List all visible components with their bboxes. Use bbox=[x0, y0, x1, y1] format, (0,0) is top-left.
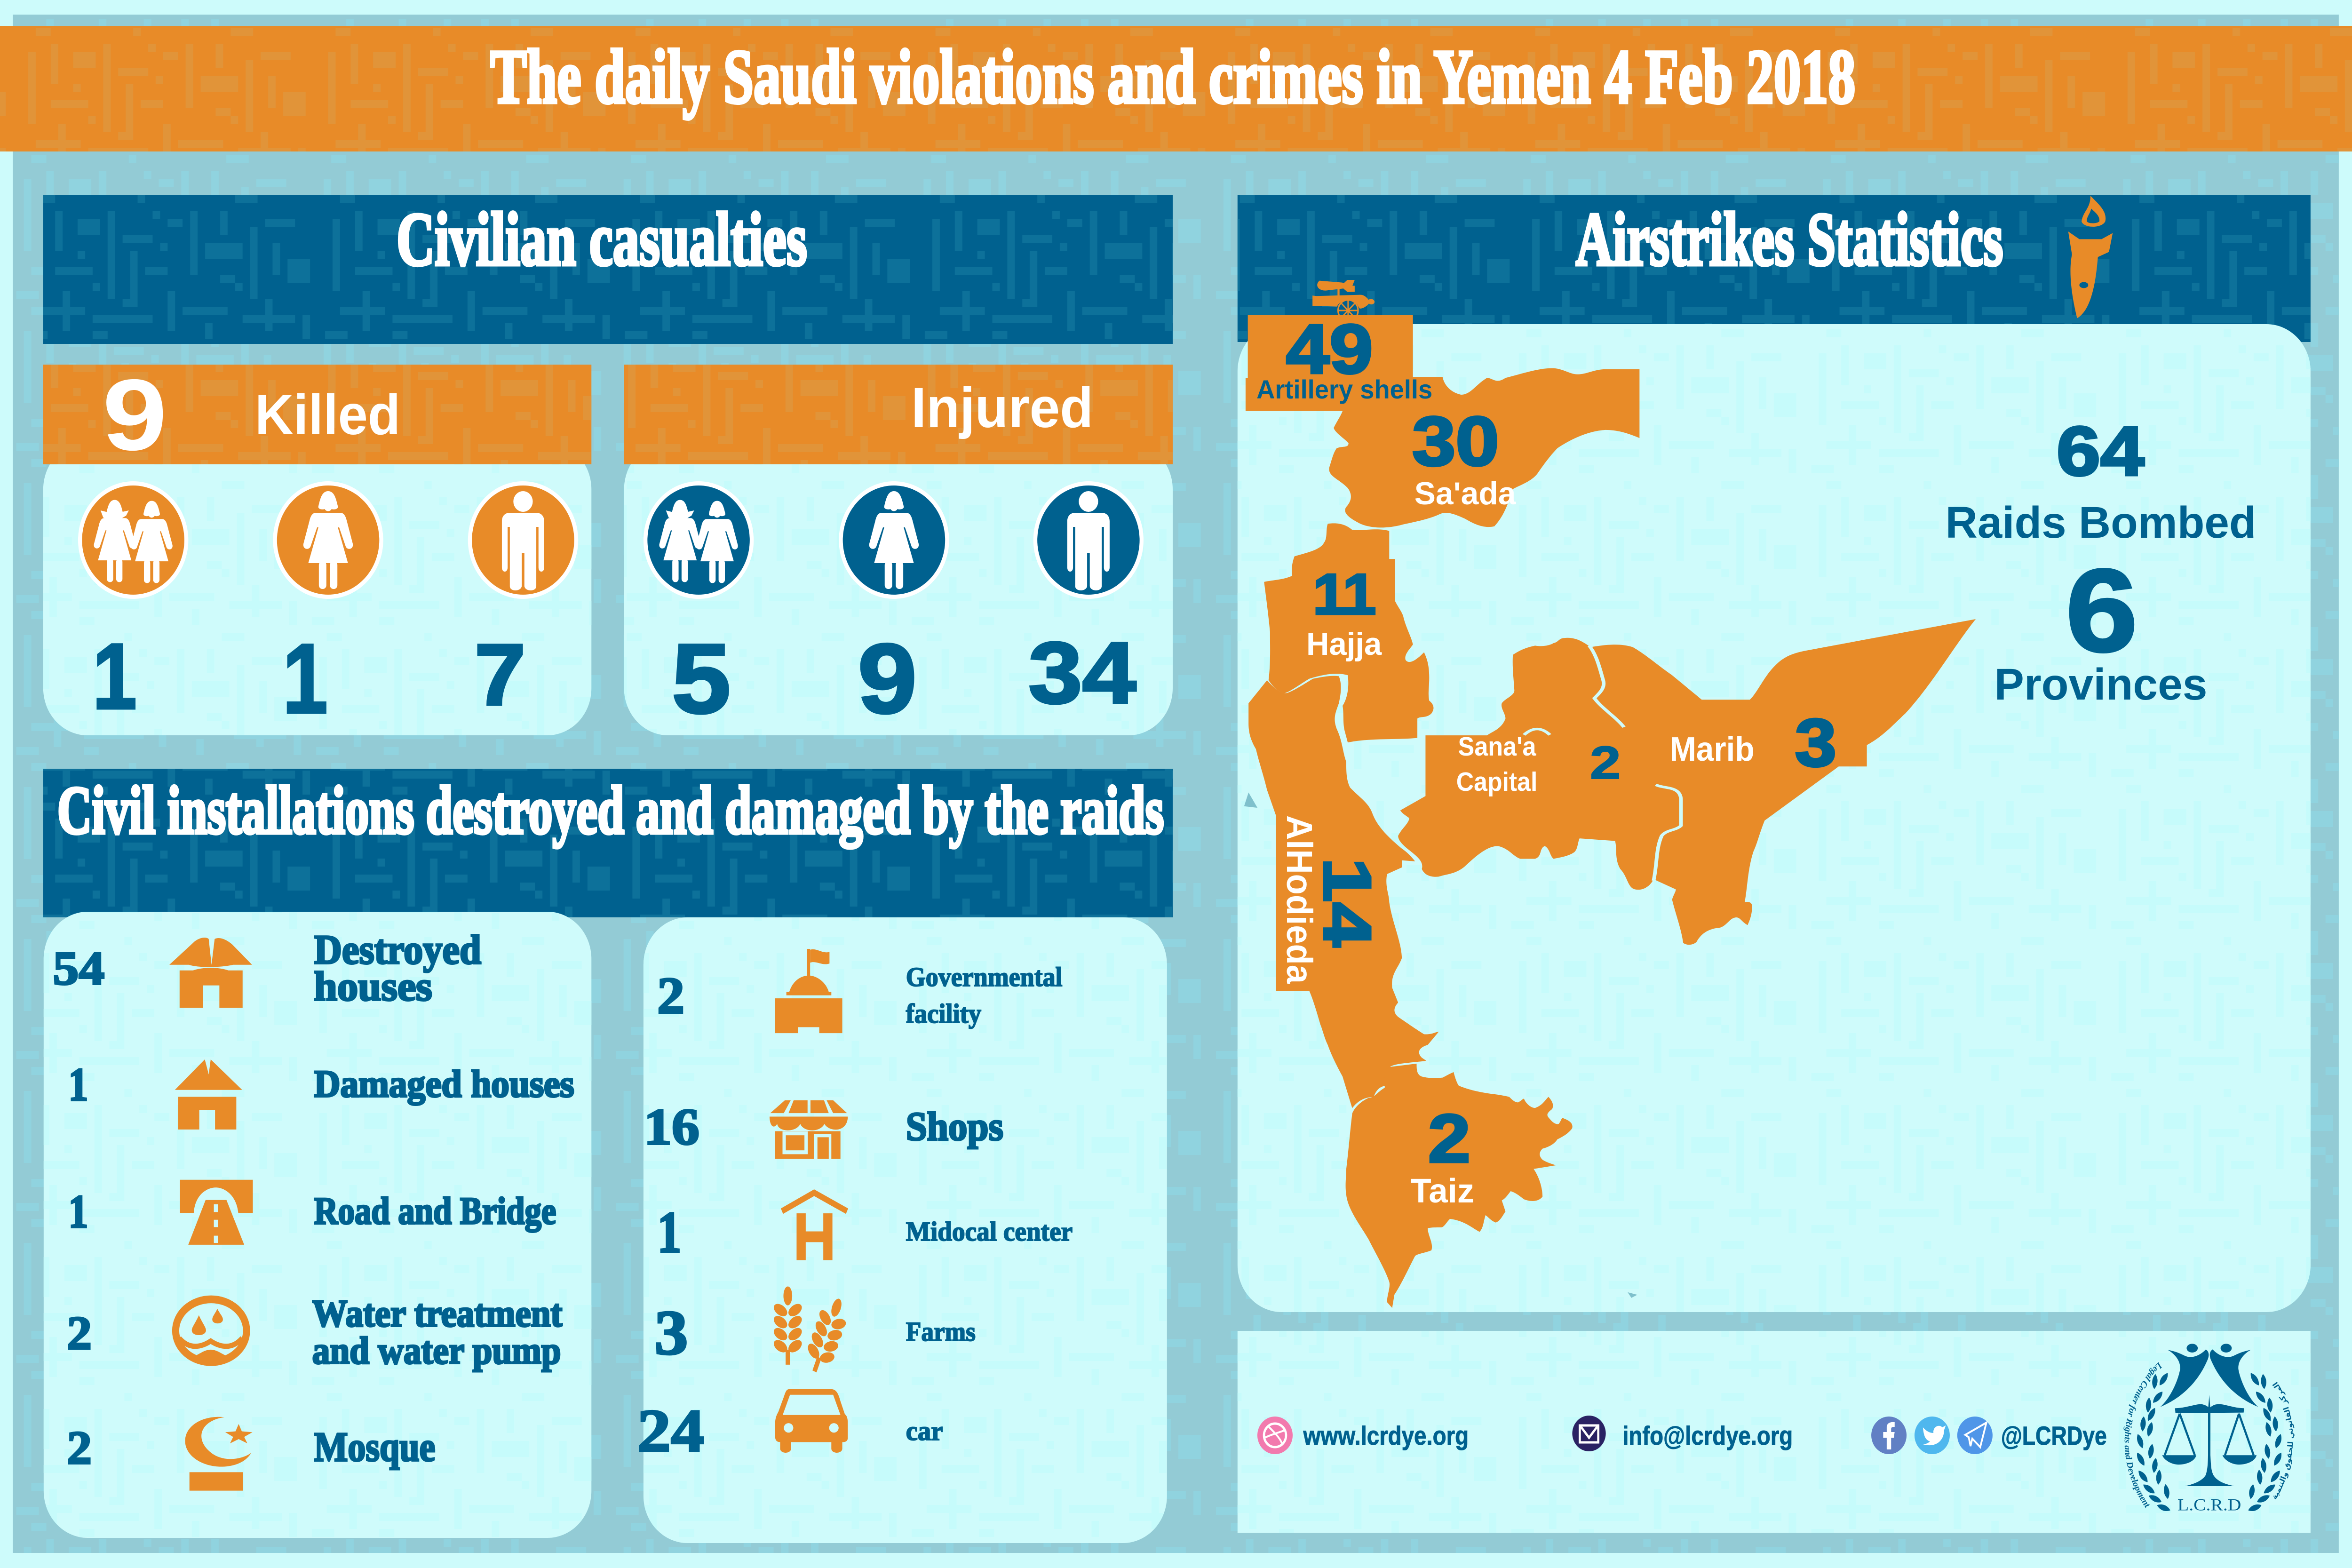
title banner bbox=[0, 26, 2352, 151]
heading: civilian casualties: Civilian casualties bbox=[397, 197, 807, 281]
icon: injured man bbox=[1033, 481, 1144, 599]
killed women count: 1 bbox=[283, 624, 328, 734]
icon: email bbox=[1572, 1416, 1606, 1451]
icon: injured children bbox=[644, 481, 754, 599]
stat: raids bombed: 64 bbox=[2057, 413, 2144, 490]
killed label: Killed bbox=[255, 383, 400, 446]
row: water count: 2 bbox=[67, 1307, 92, 1360]
label: damaged houses: Damaged houses bbox=[314, 1063, 574, 1106]
Hajja label: Hajja bbox=[1306, 626, 1383, 661]
title: The daily Saudi violations and crimes in Yemen 4 Feb 2018 bbox=[491, 34, 1855, 119]
Marib label: Marib bbox=[1670, 730, 1755, 768]
icon: water treatment bbox=[175, 1299, 246, 1362]
Capital label: Capital bbox=[1456, 766, 1537, 796]
row: damaged houses count: 1 bbox=[68, 1059, 88, 1111]
email address: info@lcrdye.org bbox=[1622, 1421, 1793, 1450]
label: mosque: Mosque bbox=[314, 1425, 435, 1470]
AlHodieda count: 14 bbox=[1310, 858, 1384, 947]
label: medical center: Midocal center bbox=[906, 1217, 1073, 1247]
artillery shells label: Artillery shells bbox=[1256, 374, 1432, 404]
injured children count: 5 bbox=[672, 624, 731, 734]
icon: government building bbox=[775, 949, 842, 1033]
icon: injured woman bbox=[839, 481, 949, 599]
icon: artillery cannon bbox=[1312, 280, 1375, 321]
stat: provinces: 6 bbox=[2066, 545, 2137, 677]
row: farms count: 3 bbox=[654, 1297, 688, 1368]
stat: provinces: Provinces bbox=[1994, 659, 2207, 709]
Taiz count: 2 bbox=[1428, 1100, 1470, 1177]
small islands bbox=[1244, 793, 1257, 808]
icon: rocket bbox=[2068, 196, 2113, 318]
province: Hajja bbox=[1264, 523, 1433, 742]
website: www.lcrdye.org bbox=[1303, 1421, 1469, 1450]
label: governmental facility bbox=[906, 962, 1063, 1029]
killed total: 9 bbox=[103, 358, 167, 471]
label: destroyed houses: houses bbox=[314, 964, 432, 1010]
province borders bbox=[1524, 645, 1681, 881]
row: shops count: 16 bbox=[644, 1098, 699, 1156]
panel: injured bbox=[624, 365, 1173, 735]
provinces: Sana'a and Marib bbox=[1398, 619, 1976, 945]
icon: killed man bbox=[468, 481, 578, 599]
stat: raids bombed: Raids Bombed bbox=[1946, 497, 2257, 548]
icon: telegram bbox=[1957, 1417, 1993, 1454]
label: farms: Farms bbox=[906, 1317, 976, 1347]
icon: twitter bbox=[1915, 1417, 1950, 1454]
row: mosque count: 2 bbox=[67, 1422, 92, 1474]
AlHodieda label: AlHodieda bbox=[1279, 815, 1319, 984]
Hajja count: 11 bbox=[1313, 563, 1376, 627]
label: water treatment: Water treatment bbox=[312, 1292, 563, 1335]
icon: damaged house bbox=[175, 1059, 242, 1130]
province: Sa'ada with artillery label box bbox=[1246, 315, 1639, 527]
Marib count: 3 bbox=[1795, 706, 1836, 780]
province: Taiz bbox=[1346, 1064, 1573, 1308]
icon: wheat bbox=[772, 1286, 854, 1378]
label: car: car bbox=[906, 1416, 943, 1446]
icon: car bbox=[775, 1389, 848, 1453]
row: medical count: 1 bbox=[657, 1200, 682, 1265]
killed men count: 7 bbox=[475, 626, 526, 723]
heading: civil installations: Civil installations destroyed and damaged by the raids bbox=[57, 773, 1164, 848]
panel: footer contacts bbox=[1238, 1331, 2311, 1533]
icon: killed woman bbox=[273, 481, 383, 599]
stat: provinces bbox=[1994, 545, 2207, 709]
stat: raids bombed bbox=[1946, 413, 2257, 548]
panel: killed bbox=[43, 358, 591, 735]
injured women count: 9 bbox=[858, 624, 917, 734]
panel: installations right list bbox=[637, 917, 1167, 1543]
icon: destroyed house bbox=[169, 938, 252, 1008]
logo: LCRD scales and wreath: Legal Center for Rights and Development bbox=[2122, 1360, 2164, 1510]
killed children count: 1 bbox=[93, 624, 137, 728]
label: shops: Shops bbox=[906, 1105, 1003, 1149]
heading: airstrikes statistics: Airstrikes Statistics bbox=[1576, 197, 2003, 281]
panel: civilian casualties header bbox=[43, 195, 1173, 344]
label: governmental facility: facility bbox=[906, 999, 981, 1029]
Sa'ada count: 30 bbox=[1412, 403, 1499, 480]
panel: airstrikes statistics bbox=[1238, 195, 2311, 1312]
panel: installations left list bbox=[44, 912, 591, 1538]
label: water treatment bbox=[312, 1292, 563, 1372]
Sana'a count: 2 bbox=[1590, 737, 1621, 789]
label: road and bridge: Road and Bridge bbox=[314, 1190, 556, 1233]
logo: LCRD scales and wreath: L.C.R.D bbox=[2177, 1496, 2241, 1514]
icon: shop bbox=[770, 1100, 848, 1159]
province: AlHodieda bbox=[1248, 676, 1439, 1108]
label: destroyed houses bbox=[314, 927, 481, 1010]
row: destroyed houses count: 54 bbox=[53, 942, 104, 995]
social handle: @LCRDye bbox=[2001, 1421, 2107, 1450]
icon: medical center bbox=[782, 1193, 847, 1260]
label: governmental facility: Governmental bbox=[906, 962, 1063, 992]
injured men count: 34 bbox=[1028, 624, 1136, 721]
icon: killed children bbox=[78, 481, 188, 599]
map of Yemen provinces bbox=[1244, 310, 1976, 1308]
row: car count: 24 bbox=[637, 1397, 704, 1465]
logo: LCRD scales and wreath bbox=[2122, 1344, 2295, 1514]
row: government count: 2 bbox=[657, 967, 684, 1025]
Sana'a label: Sana'a bbox=[1458, 731, 1537, 761]
injured label: Injured bbox=[911, 376, 1093, 439]
Taiz label: Taiz bbox=[1410, 1172, 1474, 1210]
label: destroyed houses: Destroyed bbox=[314, 927, 481, 973]
icon: mosque bbox=[185, 1417, 253, 1491]
logo: LCRD scales and wreath: المركز القانوني للحقوق والتنمية bbox=[2270, 1380, 2295, 1501]
icon: road and bridge bbox=[180, 1180, 253, 1245]
label: water treatment: and water pump bbox=[312, 1329, 561, 1372]
Sa'ada label: Sa'ada bbox=[1414, 475, 1517, 511]
icon: dribbble bbox=[1257, 1417, 1293, 1454]
artillery shells count: 49 bbox=[1286, 310, 1373, 388]
panel: civil installations header bbox=[43, 769, 1173, 917]
row: road count: 1 bbox=[68, 1186, 88, 1238]
icon: facebook bbox=[1871, 1417, 1907, 1454]
